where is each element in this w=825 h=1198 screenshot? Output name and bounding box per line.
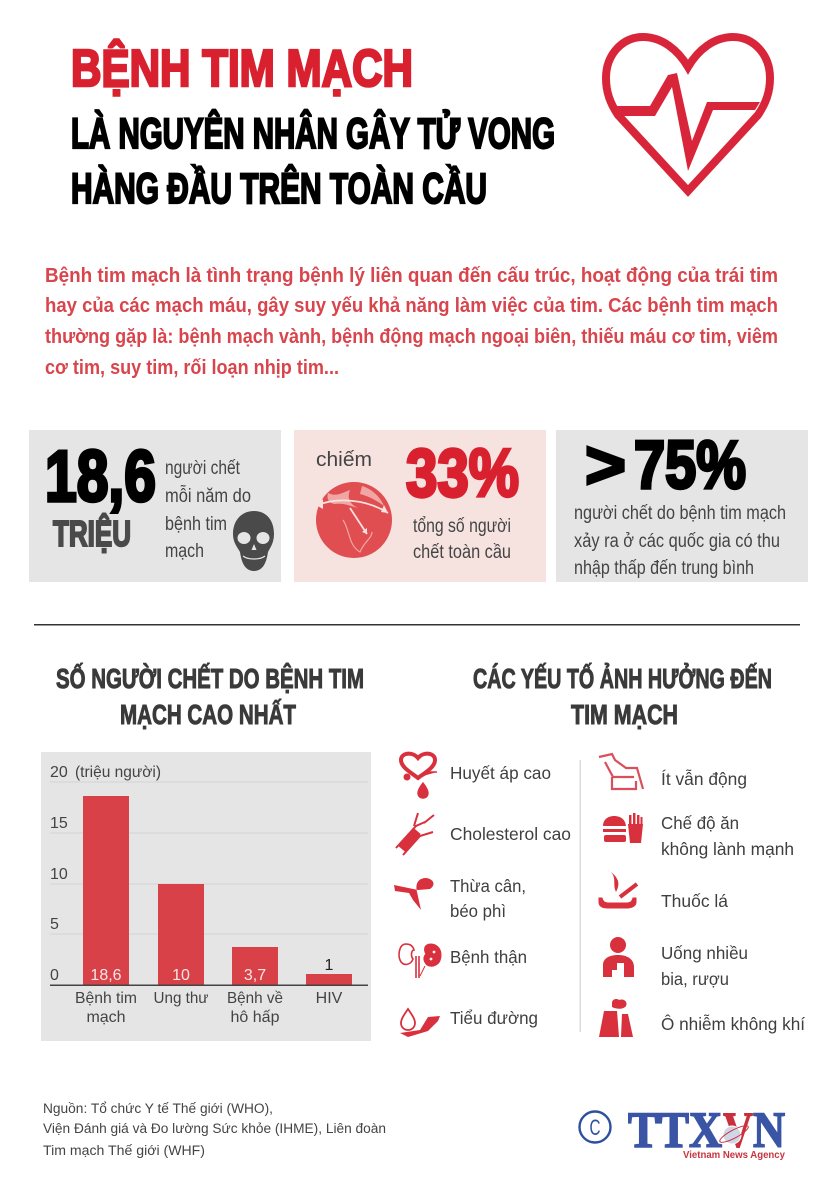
factor: air pollution	[599, 999, 805, 1037]
category labels: Bệnh về	[227, 990, 283, 1007]
icon: blood drop and hand	[400, 1009, 440, 1037]
factor: high blood pressure: Huyết áp cao	[450, 763, 551, 783]
factor: overweight: béo phì	[450, 901, 506, 921]
category labels: Bệnh tim	[75, 990, 137, 1007]
heading: risk factors	[473, 662, 772, 730]
factor: diabetes: Tiểu đường	[450, 1008, 538, 1028]
category labels: Ung thư	[154, 990, 209, 1007]
factor: unhealthy diet: không lành mạnh	[661, 839, 794, 859]
factor: high cholesterol	[396, 813, 571, 855]
intro text: hay của các mạch máu, gây suy yếu khả năng làm việc của tim. Các bệnh tim mạch	[45, 295, 778, 317]
factor: unhealthy diet	[603, 813, 794, 859]
icon: cigarette in ashtray	[599, 870, 637, 908]
stat unit: triệu: TRIỆU	[53, 512, 131, 554]
intro text: cơ tim, suy tim, rối loạn nhịp tim...	[45, 357, 339, 379]
panel: 18,6 million deaths	[29, 430, 281, 582]
stat: 18,6: 18,6	[45, 437, 156, 517]
panel description	[413, 516, 511, 563]
factor: high cholesterol: Cholesterol cao	[450, 824, 571, 844]
value labels: 1	[325, 957, 334, 974]
label: chiếm: chiếm	[316, 449, 372, 471]
icon: person drinking	[603, 937, 634, 977]
value labels: 3,7	[244, 967, 266, 984]
panel description: bệnh tim	[165, 514, 227, 535]
title	[71, 39, 555, 213]
logo: copyright TTXVN: Vietnam News Agency	[683, 1149, 785, 1161]
heading: deaths chart: SỐ NGƯỜI CHẾT DO BỆNH TIM	[56, 662, 364, 694]
panel description: người chết do bệnh tim mạch	[574, 503, 786, 524]
axis labels: 5	[50, 916, 59, 933]
factor: diabetes	[400, 1008, 538, 1037]
icon: skull	[233, 511, 274, 571]
panel description: xảy ra ở các quốc gia có thu	[574, 531, 780, 552]
logo: copyright TTXVN	[580, 1103, 785, 1161]
intro text	[45, 265, 778, 379]
panel description: nhập thấp đến trung bình	[574, 558, 754, 579]
source note	[43, 1101, 386, 1158]
icon: artery	[396, 813, 434, 855]
factor: sedentary: Ít vẫn động	[661, 768, 747, 789]
category labels: HIV	[316, 990, 343, 1007]
bars	[83, 796, 352, 985]
icon: heart with blood drop	[401, 754, 437, 798]
stat: 33%: 33%	[406, 435, 519, 511]
panel description: tổng số người	[413, 516, 511, 537]
source note: Nguồn: Tổ chức Y tế Thế giới (WHO),	[43, 1101, 273, 1116]
panel: 33% of deaths	[294, 430, 546, 582]
panel description: mỗi năm do	[165, 485, 251, 507]
panel: over 75%	[556, 427, 808, 582]
factor: alcohol	[603, 937, 748, 989]
logo: copyright TTXVN: C	[590, 1115, 601, 1140]
stat: >75%: 75%	[634, 427, 746, 503]
icon: kidneys	[399, 944, 441, 978]
panel description: chết toàn cầu	[413, 542, 511, 563]
factor: overweight: Thừa cân,	[450, 876, 526, 896]
logo: copyright TTXVN: N	[753, 1103, 785, 1159]
category labels: mạch	[86, 1009, 126, 1026]
axis labels: 0	[50, 967, 59, 984]
title: HÀNG ĐẦU TRÊN TOÀN CẦU	[71, 164, 487, 213]
logo: copyright TTXVN: TTX	[628, 1103, 722, 1159]
factor: alcohol: Uống nhiều	[661, 943, 748, 963]
axis labels: 20	[50, 764, 68, 781]
factor: kidney disease	[399, 944, 527, 978]
factor: overweight	[394, 876, 526, 921]
panel description	[165, 458, 251, 562]
axis labels: (triệu người)	[75, 764, 161, 781]
intro text: Bệnh tim mạch là tình trạng bệnh lý liên quan đến cấu trúc, hoạt động của trái tim	[45, 265, 778, 287]
axis labels: 10	[50, 866, 68, 883]
factor: alcohol: bia, rượu	[661, 969, 729, 989]
factor: tobacco: Thuốc lá	[661, 891, 728, 911]
panel description: mạch	[165, 541, 204, 562]
stat: >75%	[585, 427, 746, 503]
panel description	[574, 503, 786, 579]
heading: risk factors: TIM MẠCH	[571, 699, 678, 730]
icon: heart with pulse line	[606, 37, 770, 191]
icon: factory chimneys	[599, 999, 633, 1037]
heading: deaths chart: MẠCH CAO NHẤT	[120, 699, 296, 730]
icon: burger and fries	[603, 813, 643, 843]
factor: tobacco	[599, 870, 728, 911]
category labels: hô hấp	[231, 1009, 280, 1026]
factor: air pollution: Ô nhiễm không khí	[661, 1013, 805, 1034]
factor: kidney disease: Bệnh thận	[450, 947, 527, 967]
factor: sedentary	[599, 754, 747, 789]
stat: >75%: >	[585, 427, 626, 503]
bar chart	[41, 752, 371, 1041]
icon: armchair	[599, 754, 643, 789]
factor: high blood pressure	[401, 754, 551, 798]
axis labels	[50, 764, 161, 984]
panel description: người chết	[165, 458, 241, 479]
axis labels: 15	[50, 815, 68, 832]
source note: Viện Đánh giá và Đo lường Sức khỏe (IHME), Liên đoàn	[43, 1121, 386, 1136]
factor: unhealthy diet: Chế độ ăn	[661, 813, 739, 833]
heading: deaths chart	[56, 662, 364, 730]
icon: measuring tape	[394, 878, 433, 910]
value labels	[90, 957, 334, 984]
icon: globe	[316, 482, 392, 558]
source note: Tim mạch Thế giới (WHF)	[43, 1143, 205, 1158]
title: LÀ NGUYÊN NHÂN GÂY TỬ VONG	[71, 109, 555, 158]
logo: copyright TTXVN: V	[723, 1103, 753, 1159]
value labels: 18,6	[90, 967, 122, 984]
title: BỆNH TIM MẠCH	[71, 39, 413, 98]
category labels	[75, 990, 343, 1026]
value labels: 10	[172, 967, 190, 984]
